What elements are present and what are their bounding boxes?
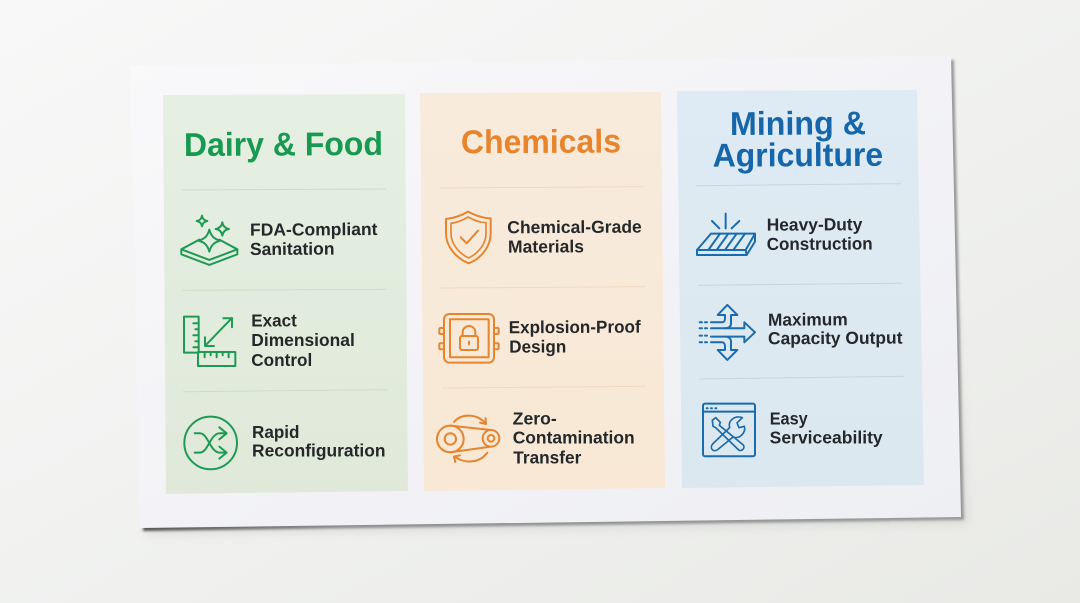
text: Easy Serviceability: Serviceability: [770, 427, 883, 447]
text: Heavy-Duty Construction: [767, 214, 873, 254]
icon: explosion-proof enclosure with lock: [439, 314, 499, 363]
heading: Mining & Agriculture: Mining &: [730, 104, 866, 142]
heading: Mining & Agriculture: Agriculture: [713, 136, 883, 174]
text: Zero-Contamination Transfer: Zero-: [513, 409, 557, 429]
icon: conveyor belt transfer: [437, 416, 499, 462]
heading: Chemicals: Chemicals: [461, 122, 621, 160]
icon: window with wrench and screwdriver: [703, 404, 755, 456]
text: Exact Dimensional Control: Control: [251, 350, 312, 370]
text: Exact Dimensional Control: Dimensional: [251, 330, 355, 350]
heading: Mining & Agriculture: [713, 104, 883, 174]
text: Maximum Capacity Output: [768, 309, 903, 348]
text: Exact Dimensional Control: [251, 311, 355, 370]
text: Zero-Contamination Transfer: Transfer: [513, 447, 581, 467]
text: Explosion-Proof Design: Design: [509, 336, 566, 357]
text: FDA-Compliant Sanitation: [250, 219, 378, 259]
text: Rapid Reconfiguration: [252, 422, 386, 461]
panel: Chemicals: [420, 92, 665, 491]
icon: rapid reconfiguration shuffle: [184, 417, 237, 469]
icon: sparkling clean surface: [181, 216, 237, 265]
text: Maximum Capacity Output: Maximum: [768, 309, 848, 330]
icon: shield with check: [446, 212, 491, 263]
text: Heavy-Duty Construction: Construction: [767, 233, 873, 254]
text: Rapid Reconfiguration: Rapid: [252, 422, 300, 442]
text: Chemical-Grade Materials: Chemical-Grade: [507, 217, 642, 237]
text: Easy Serviceability: Easy: [770, 408, 808, 428]
text: FDA-Compliant Sanitation: FDA-Compliant: [250, 219, 378, 240]
icon: rulers and dimension arrow: [184, 317, 235, 366]
text: Maximum Capacity Output: Capacity Output: [768, 328, 903, 348]
icon: diverging capacity arrows: [700, 305, 755, 360]
text: Explosion-Proof Design: [509, 317, 641, 357]
text: Chemical-Grade Materials: [507, 217, 642, 257]
panel: Mining & Agriculture: [677, 90, 924, 488]
text: Zero-Contamination Transfer: [513, 409, 635, 467]
text: Explosion-Proof Design: Explosion-Proof: [509, 317, 641, 337]
paper card: [130, 56, 961, 528]
text: Chemical-Grade Materials: Materials: [508, 236, 584, 257]
panel: Dairy & Food: [163, 94, 408, 494]
heading: Dairy & Food: Dairy & Food: [184, 125, 383, 163]
icon: heavy-duty plate: [697, 214, 755, 255]
text: Zero-Contamination Transfer: Contamination: [513, 427, 635, 447]
text: Heavy-Duty Construction: Heavy-Duty: [767, 214, 863, 235]
text: Easy Serviceability: [770, 408, 883, 447]
text: Exact Dimensional Control: Exact: [251, 311, 297, 331]
text: Rapid Reconfiguration: Reconfiguration: [252, 441, 386, 461]
text: FDA-Compliant Sanitation: Sanitation: [250, 239, 335, 259]
